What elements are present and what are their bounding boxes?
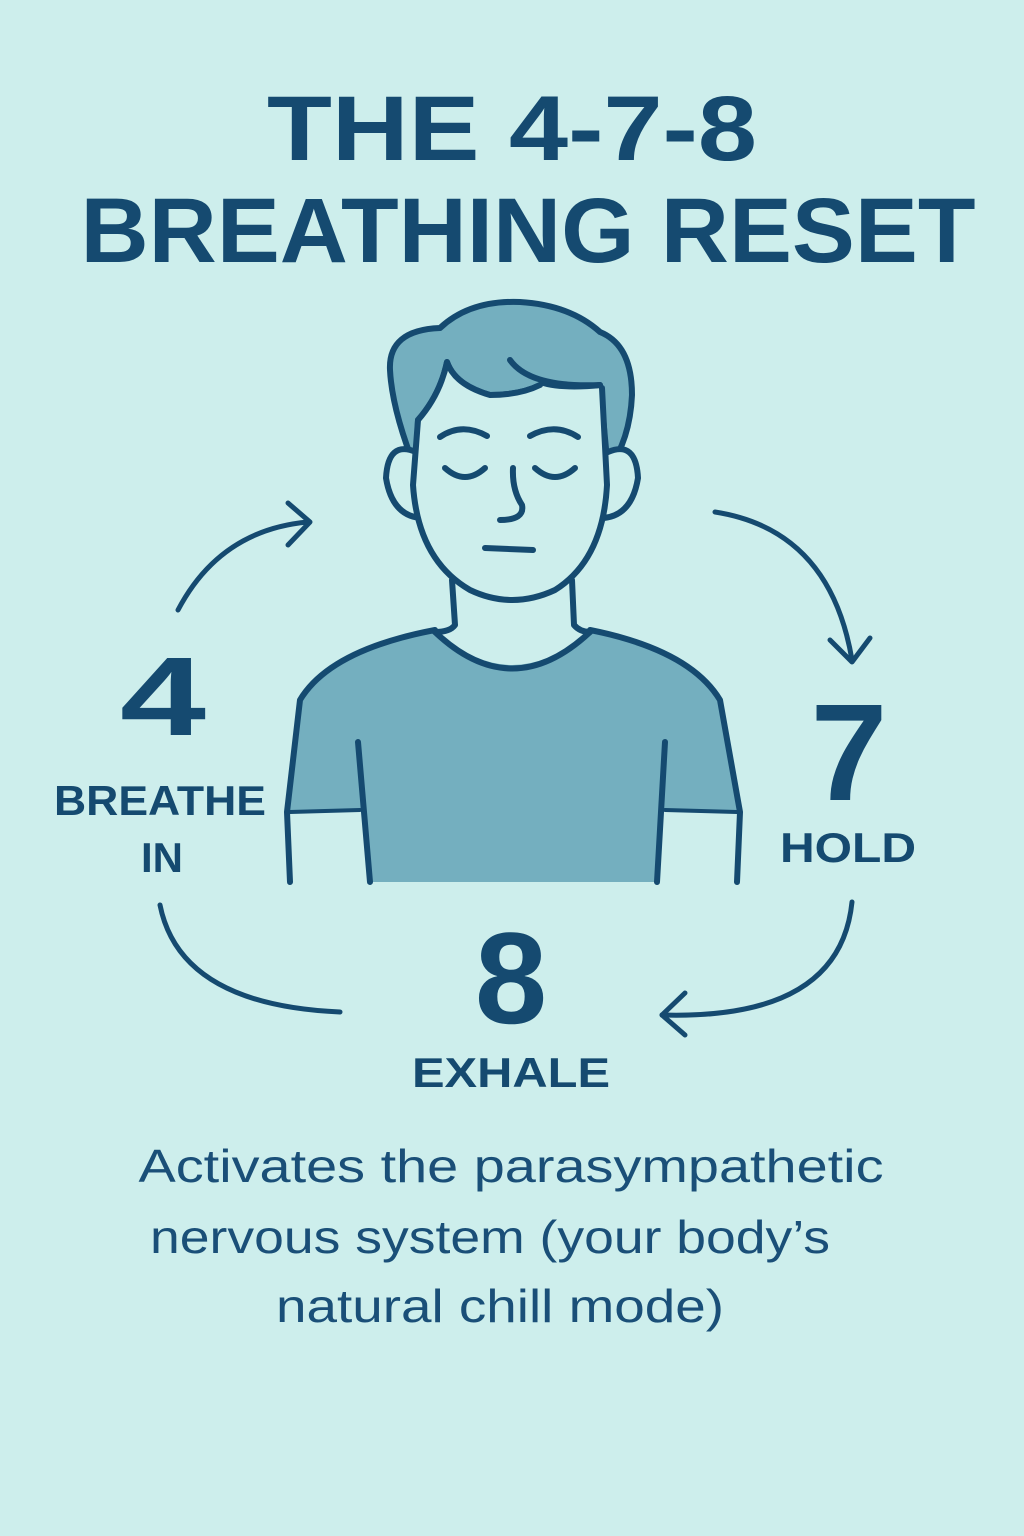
nose: [500, 468, 522, 520]
labels: HOLD: [780, 824, 916, 871]
title: THE 4-7-8: [267, 78, 757, 180]
description: [138, 1140, 884, 1332]
labels: 7: [811, 676, 887, 830]
hair: [390, 302, 632, 470]
labels: EXHALE: [412, 1049, 610, 1096]
labels: IN: [141, 834, 183, 881]
labels: [54, 634, 916, 1096]
labels: 8: [475, 905, 547, 1051]
face: [413, 362, 607, 599]
labels: 4: [120, 634, 206, 759]
illustration: person: [287, 302, 740, 882]
eyebrows: [440, 429, 578, 437]
shirt outline: [287, 630, 740, 882]
description: nervous system (your body’s: [150, 1211, 830, 1263]
description: Activates the parasympathetic: [138, 1140, 884, 1192]
ears: [386, 449, 420, 518]
title: BREATHING RESET: [80, 180, 975, 282]
description: natural chill mode): [276, 1280, 724, 1332]
shirt fill: [287, 630, 740, 882]
arrows: [160, 503, 870, 1035]
labels: BREATHE: [54, 777, 266, 824]
mouth: [485, 548, 533, 550]
eyes: [445, 468, 575, 477]
neck: [435, 580, 590, 632]
title: [80, 78, 975, 282]
